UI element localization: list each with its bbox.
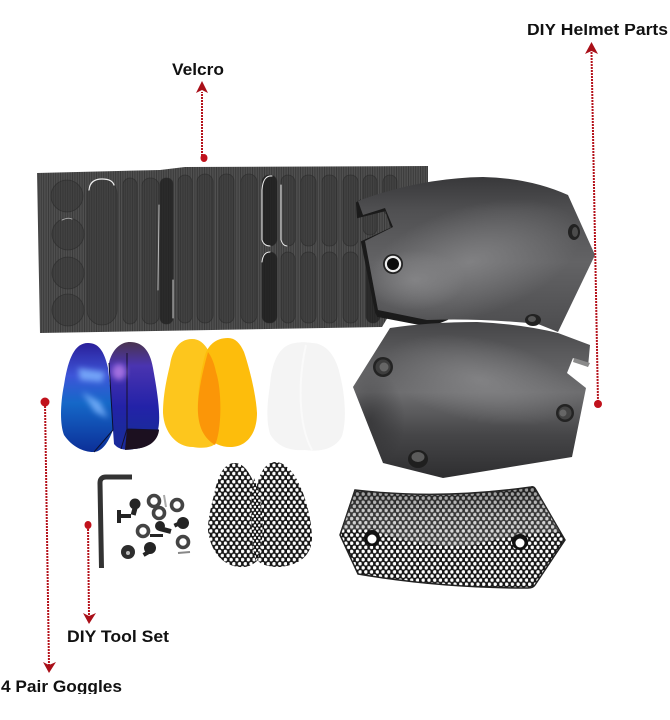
- panel: velcro sheet: [37, 166, 428, 333]
- arrow: tool set: [83, 521, 96, 624]
- visor holes: [364, 530, 528, 550]
- upper screws right: [525, 224, 580, 326]
- icon: screws and washers: [117, 495, 190, 559]
- label: DIY Helmet Parts: DIY Helmet Parts: [527, 20, 668, 39]
- label: 4 Pair Goggles: 4 Pair Goggles: [1, 677, 122, 696]
- lower screws: [373, 357, 574, 468]
- arrow: velcro: [196, 81, 208, 162]
- velcro circles: [51, 180, 84, 326]
- panel: visor mesh: [340, 487, 565, 588]
- arrow: helmet parts: [585, 42, 602, 408]
- label: DIY Tool Set: DIY Tool Set: [67, 627, 169, 646]
- amber overlap: [198, 352, 220, 445]
- upper screw left: [383, 254, 403, 274]
- velcro highlights: [62, 176, 287, 318]
- icon: hex wrench: [100, 477, 132, 568]
- panel: goggle mesh covers: [208, 462, 312, 567]
- velcro long strips: [87, 174, 257, 325]
- panel: clear goggles: [267, 342, 345, 451]
- mesh overlap: [251, 478, 263, 562]
- label: Velcro: Velcro: [172, 60, 224, 79]
- panel: amber goggles: [163, 338, 257, 448]
- panel: lower helmet part: [335, 318, 590, 478]
- panel: iridescent blue goggles: [61, 342, 159, 452]
- panel: upper helmet part: [356, 177, 595, 332]
- velcro short strips: [262, 175, 397, 323]
- arrow: goggles: [40, 398, 56, 673]
